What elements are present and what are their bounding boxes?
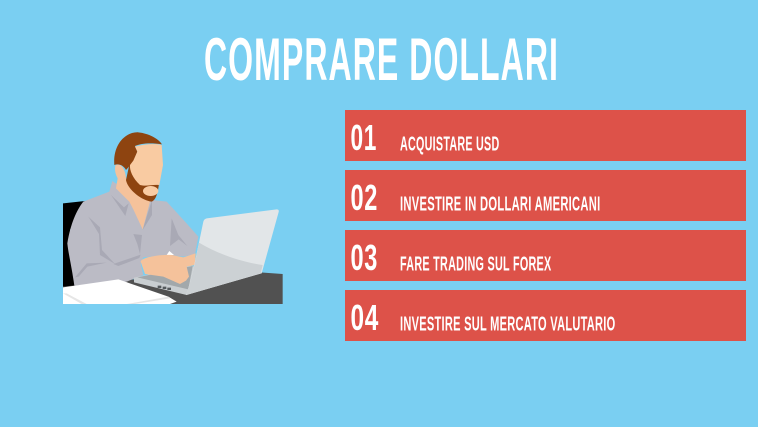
laptop screen shade xyxy=(186,243,263,295)
desk xyxy=(63,272,283,304)
face xyxy=(130,144,163,186)
mouth patch xyxy=(143,186,158,196)
list item 01: ACQUISTARE USD xyxy=(400,134,500,156)
list item 03 xyxy=(345,230,746,281)
keyboard xyxy=(137,266,193,289)
illustration: man working at laptop xyxy=(63,132,283,304)
shirt xyxy=(67,181,198,286)
laptop screen xyxy=(186,209,279,295)
list item 02: 02 xyxy=(350,177,378,218)
paper edge xyxy=(63,293,170,304)
shirt collar xyxy=(143,200,152,230)
list item 02: INVESTIRE IN DOLLARI AMERICANI xyxy=(400,194,600,216)
laptop ports xyxy=(158,286,171,290)
list item 04: 04 xyxy=(350,297,379,338)
list item 01 xyxy=(345,110,746,161)
list item 03: FARE TRADING SUL FOREX xyxy=(400,254,552,276)
neck and ear xyxy=(115,165,150,229)
list item 04 xyxy=(345,290,746,341)
hand xyxy=(141,253,196,284)
list item 02 xyxy=(345,170,746,221)
list item 01: 01 xyxy=(350,117,377,158)
beard xyxy=(126,162,159,202)
laptop base xyxy=(134,266,261,295)
list item 03: 03 xyxy=(350,237,378,278)
chair xyxy=(63,201,85,287)
hair xyxy=(114,132,162,170)
papers xyxy=(63,279,177,304)
